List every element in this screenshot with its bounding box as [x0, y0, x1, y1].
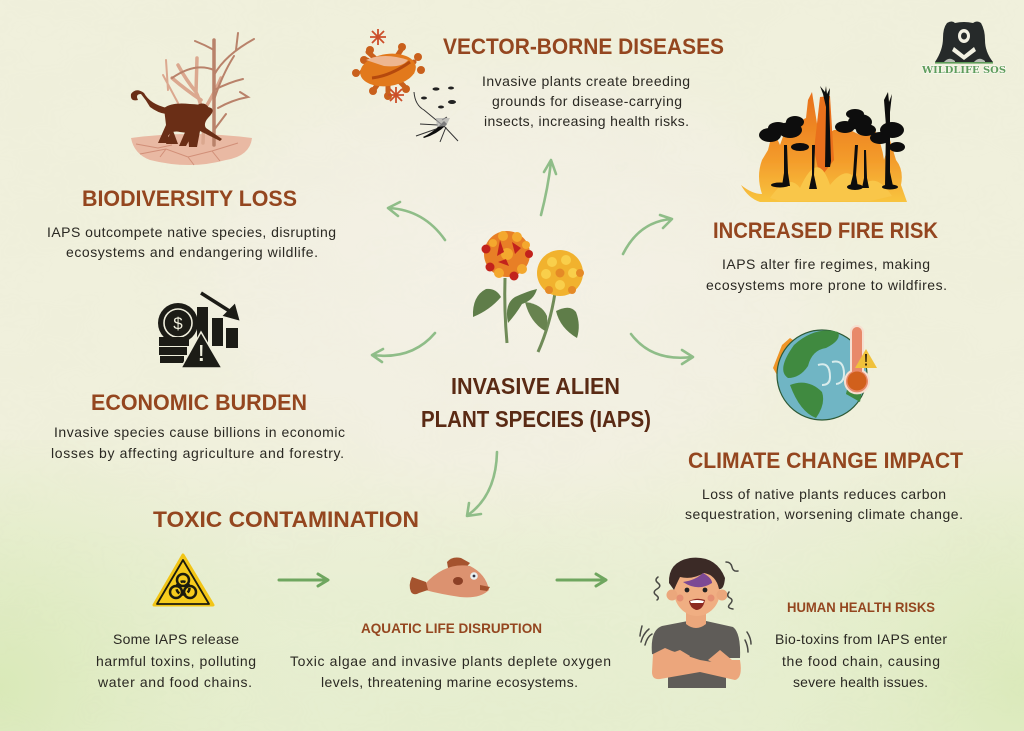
text: fire description: [706, 256, 947, 293]
text: climate description: sequestration, worsening climate change.: [685, 506, 963, 522]
text: biodiversity description: ecosystems and endangering wildlife.: [66, 244, 318, 260]
heading: increased fire risk: INCREASED FIRE RISK: [713, 218, 938, 243]
text: aquatic description: [290, 653, 611, 690]
title: invasive alien plant species: [421, 373, 651, 432]
logo: Wildlife SOS: [921, 22, 1006, 76]
arrow: to toxic contamination: [467, 452, 497, 516]
icon: burning forest: [741, 86, 907, 202]
title: invasive alien plant species: PLANT SPECIES (IAPS): [421, 406, 651, 432]
text: human health description: the food chain, causing: [782, 653, 940, 669]
text: economic description: Invasive species cause billions in economic: [54, 424, 345, 440]
text: human health description: [775, 631, 947, 690]
logo: Wildlife SOS: WILDLIFE SOS: [921, 65, 1006, 76]
icon: economic decline: [158, 293, 238, 368]
icon: monkey and bare trees on cracked earth: [131, 33, 254, 165]
icon: lantana flowers: [473, 231, 584, 352]
text: economic description: [51, 424, 345, 461]
heading: aquatic life disruption: AQUATIC LIFE DISRUPTION: [361, 620, 542, 636]
arrow: to vector-borne diseases: [541, 160, 556, 215]
arrow: to climate change: [631, 334, 693, 364]
icon: unwell person with crossed arms: [640, 558, 751, 688]
text: biohazard description: water and food chains.: [97, 674, 252, 690]
heading: human health risks: HUMAN HEALTH RISKS: [787, 599, 935, 615]
heading: vector-borne diseases: VECTOR-BORNE DISEASES: [443, 34, 724, 59]
heading: toxic contamination: TOXIC CONTAMINATION: [153, 507, 419, 532]
arrow: to biodiversity loss: [388, 202, 445, 240]
arrow: fish to human: [557, 574, 606, 586]
heading: economic burden: ECONOMIC BURDEN: [91, 390, 307, 415]
arrow: to economic burden: [372, 333, 435, 362]
text: biodiversity description: [47, 224, 336, 260]
title: invasive alien plant species: INVASIVE ALIEN: [451, 373, 620, 399]
text: biohazard description: [96, 631, 256, 690]
heading: biodiversity loss: BIODIVERSITY LOSS: [82, 186, 297, 211]
text: human health description: severe health issues.: [793, 674, 928, 690]
text: vector-borne description: grounds for disease-carrying: [492, 93, 682, 109]
text: biohazard description: Some IAPS release: [113, 631, 239, 647]
arrow: to fire risk: [623, 215, 672, 254]
icon: economic decline: $: [173, 314, 183, 333]
text: biodiversity description: IAPS outcompete native species, disrupting: [47, 224, 336, 240]
text: biohazard description: harmful toxins, polluting: [96, 653, 256, 669]
icon: biohazard sign: [154, 555, 213, 605]
text: fire description: ecosystems more prone to wildfires.: [706, 277, 947, 293]
heading: climate change impact: CLIMATE CHANGE IMPACT: [688, 448, 964, 473]
arrow: biohazard to fish: [279, 574, 328, 586]
text: economic description: losses by affecting agriculture and forestry.: [51, 445, 344, 461]
text: vector-borne description: insects, increasing health risks.: [484, 113, 689, 129]
text: vector-borne description: Invasive plants create breeding: [482, 73, 690, 89]
icon: virus and mosquitoes: [352, 29, 458, 142]
text: human health description: Bio-toxins from IAPS enter: [775, 631, 947, 647]
text: climate description: [685, 486, 963, 522]
text: climate description: Loss of native plants reduces carbon: [702, 486, 946, 502]
text: aquatic description: levels, threatening marine ecosystems.: [321, 674, 578, 690]
text: vector-borne description: [482, 73, 690, 129]
icon: sick fish: [410, 558, 490, 597]
icon: warming globe: [773, 326, 877, 420]
text: fire description: IAPS alter fire regimes, making: [722, 256, 930, 272]
text: aquatic description: Toxic algae and invasive plants deplete oxygen: [290, 653, 611, 669]
